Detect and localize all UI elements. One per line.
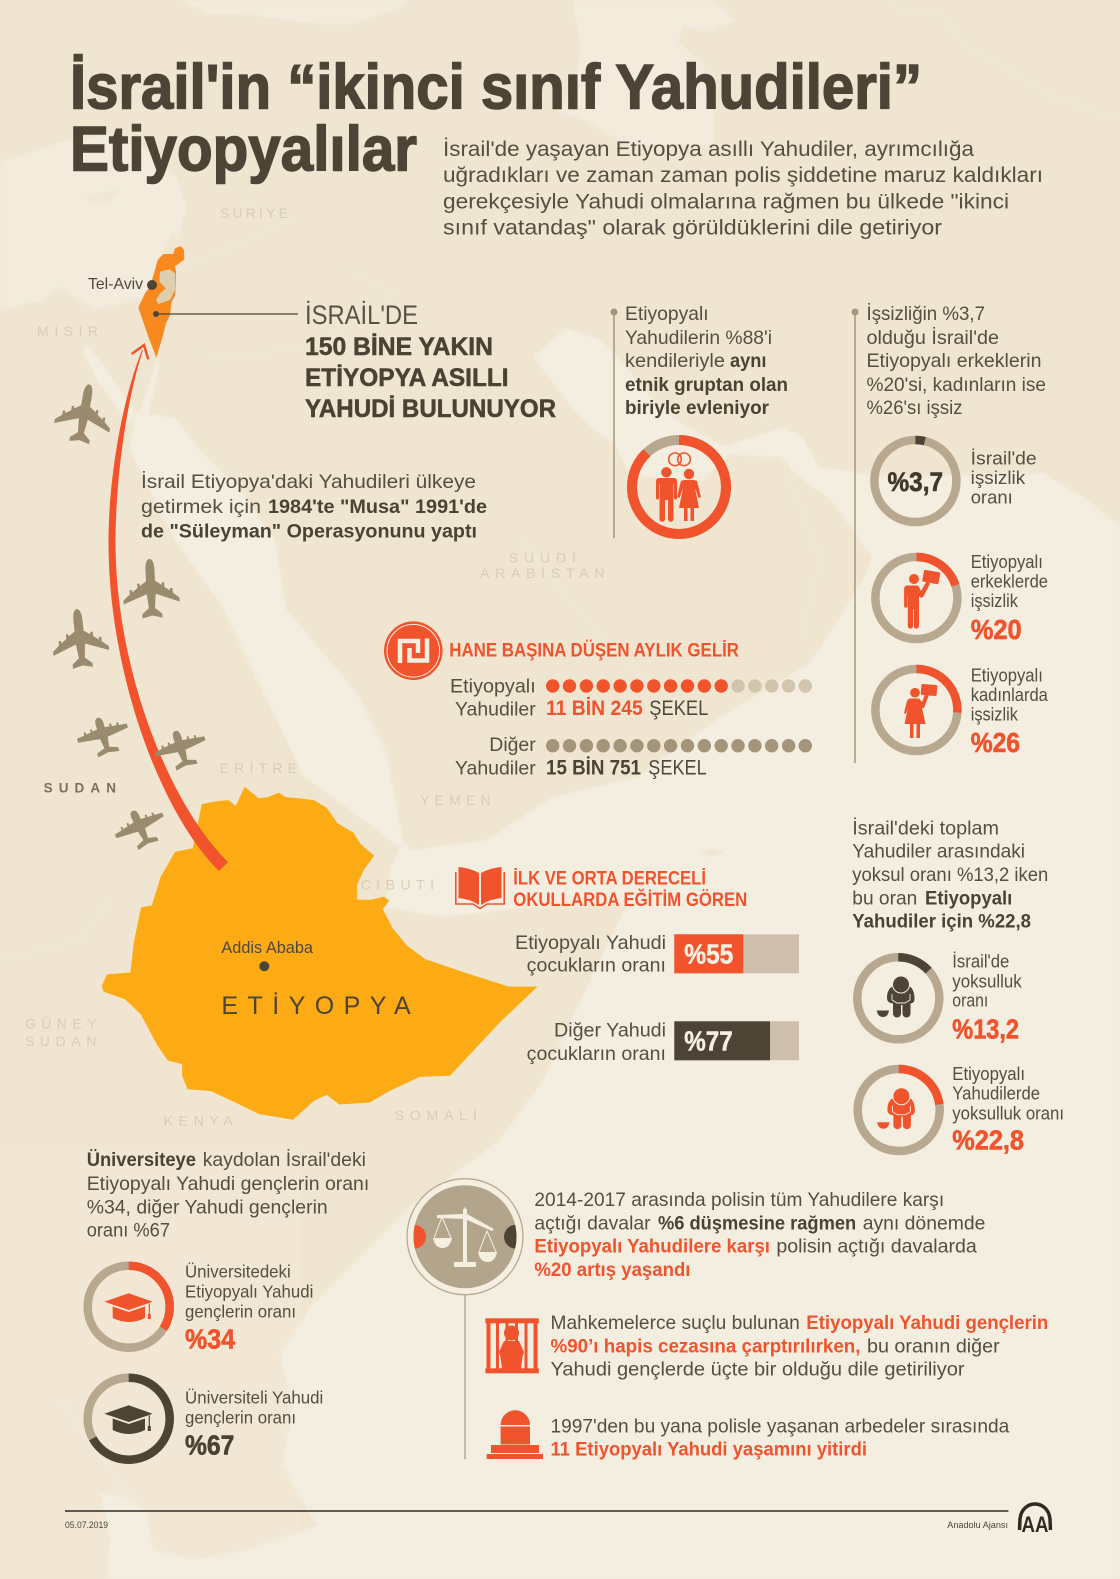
panel: unemployment (852, 302, 1049, 763)
panel: marriage: kendileriyle (625, 350, 725, 372)
map labels (25, 204, 604, 1128)
label: Ethiopia: ETİYOPYA (221, 991, 411, 1020)
label: Ethiopian Jews (450, 675, 536, 721)
label: other children (527, 1020, 666, 1065)
title: Etiyopyalılar (70, 114, 417, 184)
label: other Jews: Yahudiler (455, 757, 536, 779)
label: Israel unemployment: İsrail'de (971, 447, 1037, 468)
ring: 3.7 percent (874, 440, 956, 522)
logo: Anadolu Agency (1020, 1504, 1050, 1537)
icon: tombstone (487, 1410, 543, 1459)
map labels: YEMEN (420, 792, 491, 808)
footer: Anadolu Ajansı (947, 1520, 1008, 1531)
text: police cases: Etiyopyalı Yahudilere karşı (534, 1236, 770, 1258)
ring: 22.8 percent (858, 1069, 940, 1151)
panel: marriage: Yahudilerin %88'i (625, 327, 772, 349)
callout: 150 thousand: 150 BİNE YAKIN (305, 333, 493, 361)
text: police cases: %6 düşmesine rağmen (658, 1212, 856, 1234)
label: Ethiopian university (185, 1262, 313, 1354)
label: Ethiopian Jews: Yahudiler (455, 699, 536, 721)
icon: graduation cap dark (104, 1405, 153, 1434)
label: Israel poverty: oranı (952, 990, 988, 1011)
ring: 13.2 percent (857, 957, 939, 1039)
text: police cases: 2014-2017 arasında polisin tüm Yahudilere karşı (534, 1189, 944, 1211)
dots: other income (546, 739, 812, 752)
label: Ethiopian poverty: %22,8 (952, 1124, 1024, 1155)
large plane 2 (121, 558, 180, 619)
label: Israel unemployment: oranı (971, 486, 1013, 507)
text: poverty: İsrail'deki toplam (852, 816, 999, 839)
text: court: %90’ı hapis cezasına çarptırılırken, (550, 1335, 860, 1357)
panel: marriage: Etiyopyalı (625, 303, 709, 325)
large plane 1 (52, 380, 117, 447)
text: police cases: açtığı davalar (534, 1212, 651, 1234)
Israel map (138, 246, 184, 358)
text: police cases: %20 artış yaşandı (534, 1259, 690, 1281)
map labels: ERİTRE (220, 759, 297, 776)
text: deaths: 1997'den bu yana polisle yaşanan arbedeler sırasında (550, 1415, 1009, 1437)
map labels: KENYA (164, 1112, 234, 1128)
label: Israel poverty: %13,2 (952, 1013, 1019, 1044)
text: poverty: Yahudiler için %22,8 (852, 911, 1031, 933)
label: Israel poverty (952, 951, 1022, 1044)
large plane 3 (49, 606, 111, 671)
label: other Jews: Diğer (489, 734, 536, 756)
small plane 1 (73, 710, 134, 762)
panel: marriage: etnik gruptan olan (625, 374, 788, 396)
text: court: bu oranın diğer (867, 1335, 1000, 1357)
label: women unemployment: kadınlarda (971, 684, 1049, 705)
panel: marriage (610, 303, 788, 538)
text: deaths (550, 1415, 1009, 1461)
heading: education: OKULLARDA EĞİTİM GÖREN (513, 889, 747, 911)
panel: unemployment: %20'si, kadınların ise (866, 374, 1046, 396)
label: Ethiopian children: çocukların oranı (527, 955, 666, 977)
label: Ethiopian university: gençlerin oranı (185, 1301, 296, 1321)
label: Ethiopian children: Etiyopyalı Yahudi (515, 932, 666, 954)
label: women unemployment: %26 (971, 727, 1020, 758)
value: 3.7 percent: %3,7 (888, 467, 943, 497)
footer (65, 1504, 1050, 1537)
bar: 77 percent: %77 (684, 1026, 733, 1057)
panel: unemployment: %26'sı işsiz (866, 397, 962, 419)
label: Ethiopian poverty: Etiyopyalı (952, 1063, 1025, 1084)
panel: income (384, 621, 812, 779)
text: university: Üniversiteye (87, 1148, 196, 1171)
panel: marriage: aynı (730, 350, 766, 372)
panel: unemployment: Etiyopyalı erkeklerin (866, 350, 1042, 372)
text: police cases: polisin açtığı davalarda (776, 1236, 977, 1258)
ring: 34 percent (88, 1266, 170, 1348)
title (70, 52, 922, 184)
label: Tel-Aviv with dot: Tel-Aviv (88, 276, 143, 293)
text: university: oranı %67 (87, 1220, 170, 1242)
ring: 20 percent (875, 557, 957, 639)
label: Ethiopian poverty: Yahudilerde (952, 1082, 1040, 1103)
dots: Ethiopian income (546, 679, 812, 693)
icon: book (456, 867, 504, 908)
logo: Anadolu Agency: AA (1022, 1512, 1049, 1537)
map labels: GÜNEY (25, 1015, 97, 1032)
label: men unemployment: %20 (971, 614, 1022, 645)
bar: 55 percent (674, 934, 799, 973)
heading: education: İLK VE ORTA DERECELİ (513, 868, 706, 889)
label: Israel poverty: yoksulluk (952, 971, 1022, 992)
text: poverty: bu oran (852, 887, 917, 909)
intro paragraph: uğradıkları ve zaman zaman polis şiddetine maruz kaldıkları (443, 164, 1043, 187)
callout line to Israel (153, 311, 298, 317)
icon: poor person red (877, 1088, 915, 1129)
callout: 150 thousand: İSRAİL'DE (305, 299, 418, 330)
text: court: Mahkemelerce suçlu bulunan (550, 1312, 800, 1334)
ring: 88 percent (632, 440, 726, 534)
text: operations: de "Süleyman" Operasyonunu yaptı (141, 520, 477, 542)
heading: income: HANE BAŞINA DÜŞEN AYLIK GELİR (449, 641, 739, 662)
label: men unemployment: işsizlik (971, 590, 1019, 611)
label: Israel unemployment: işsizlik (971, 467, 1026, 488)
value: Ethiopian income (546, 697, 708, 720)
icon: poor person dark (877, 976, 914, 1018)
label: other university: %67 (185, 1429, 234, 1460)
label: Israel poverty: İsrail'de (952, 951, 1009, 972)
text: university: Etiyopyalı Yahudi gençlerin oranı (87, 1173, 369, 1195)
label: Ethiopian Jews: Etiyopyalı (450, 675, 536, 697)
text: police cases (534, 1189, 985, 1281)
small plane 2 (150, 723, 212, 775)
label: Ethiopian university: %34 (185, 1323, 235, 1354)
label: other Jews (455, 734, 536, 779)
value: other income: 15 BİN 751 (546, 756, 641, 779)
heading: education (513, 868, 747, 911)
text: operations (141, 470, 487, 542)
label: women unemployment: işsizlik (971, 704, 1019, 725)
bar: 55 percent: %55 (684, 938, 733, 969)
label: other children: çocukların oranı (527, 1043, 666, 1065)
callout: 150 thousand: YAHUDİ BULUNUYOR (305, 395, 556, 423)
intro paragraph: İsrail'de yaşayan Etiyopya asıllı Yahudiler, ayrımcılığa (443, 138, 974, 161)
map labels: MISIR (37, 323, 98, 339)
panel: justice (402, 1179, 1048, 1461)
label: other university: gençlerin oranı (185, 1407, 296, 1427)
label: Ethiopian children (515, 932, 666, 977)
text: operations: getirmek için (141, 496, 261, 518)
title: İsrail'in “ikinci sınıf Yahudileri” (70, 52, 922, 122)
text: operations: İsrail Etiyopya'daki Yahudileri ülkeye (141, 470, 476, 493)
map labels: SUUDİ (509, 549, 576, 566)
label: men unemployment: erkeklerde (971, 571, 1048, 592)
label: Ethiopian university: Etiyopyalı Yahudi (185, 1282, 313, 1302)
value: other income: ŞEKEL (648, 756, 707, 779)
map labels: ARABİSTAN (480, 564, 604, 581)
label: Sudan: SUDAN (44, 781, 116, 796)
map labels: SURİYE (220, 204, 288, 221)
ring: 26 percent (875, 669, 957, 751)
label: Ethiopian poverty (952, 1063, 1064, 1155)
icon: couple with rings (656, 453, 701, 522)
icon: scales (402, 1179, 528, 1295)
label: men unemployment (971, 551, 1048, 645)
text: university: %34, diğer Yahudi gençlerin (87, 1196, 328, 1218)
text: university (87, 1148, 369, 1242)
icon: shekel (384, 621, 443, 680)
callout: 150 thousand (305, 299, 556, 423)
icon: prison (485, 1318, 539, 1373)
intro paragraph: gerekçesiyle Yahudi olmalarına rağmen bu ülkede "ikinci (443, 190, 1009, 214)
text: poverty (852, 816, 1048, 933)
label: Addis Ababa with dot (221, 938, 314, 971)
ring: 67 percent (88, 1378, 170, 1460)
icon: graduation cap red (104, 1293, 153, 1322)
text: poverty: Etiyopyalı (925, 887, 1012, 909)
text: deaths: 11 Etiyopyalı Yahudi yaşamını yitirdi (550, 1439, 867, 1461)
footer: 05.07.2019 (65, 1520, 108, 1531)
map labels: CİBUTİ (361, 875, 434, 892)
label: other children: Diğer Yahudi (554, 1020, 666, 1042)
small plane 3 (109, 800, 172, 856)
text: court: Etiyopyalı Yahudi gençlerin (806, 1312, 1048, 1334)
value: other income (546, 756, 707, 779)
label: men unemployment: Etiyopyalı (971, 551, 1043, 572)
panel: university (87, 1148, 369, 1460)
icon: woman with placard (904, 684, 937, 738)
label: women unemployment (971, 665, 1049, 758)
connector line (464, 1295, 466, 1459)
callout: 150 thousand: ETİYOPYA ASILLI (305, 364, 509, 392)
label: Israel unemployment (971, 447, 1037, 507)
map labels: SUDAN (25, 1033, 96, 1049)
text: university: kaydolan İsrail'deki (203, 1148, 366, 1171)
text: poverty: Yahudiler arasındaki (852, 841, 1025, 863)
panel: education (456, 867, 799, 1065)
map labels: SOMALİ (395, 1106, 477, 1123)
panel: poverty (852, 816, 1064, 1155)
label: other university: Üniversiteli Yahudi (185, 1387, 323, 1407)
label: Ethiopian poverty: yoksulluk oranı (952, 1102, 1064, 1123)
panel: marriage: biriyle evleniyor (625, 397, 769, 419)
label: other university (185, 1387, 323, 1460)
text: court: Yahudi gençlerde üçte bir olduğu dile getiriliyor (550, 1359, 965, 1381)
icon: man with placard (904, 570, 940, 629)
intro paragraph: sınıf vatandaş" olarak görüldüklerini dile getiriyor (443, 216, 942, 240)
intro paragraph (443, 138, 1043, 240)
value: Ethiopian income: ŞEKEL (649, 697, 708, 720)
migration arrow (108, 345, 228, 871)
text: poverty: yoksul oranı %13,2 iken (852, 864, 1048, 886)
label: Addis Ababa with dot: Addis Ababa (221, 938, 314, 957)
text: court (550, 1312, 1048, 1381)
text: police cases: aynı dönemde (863, 1212, 985, 1234)
Ethiopia map shape (102, 787, 537, 1120)
panel: unemployment: olduğu İsrail'de (866, 326, 999, 349)
value: Ethiopian income: 11 BİN 245 (546, 697, 643, 720)
text: operations: 1984'te "Musa" 1991'de (268, 496, 487, 518)
label: women unemployment: Etiyopyalı (971, 665, 1043, 686)
label: Ethiopian university: Üniversitedeki (185, 1262, 291, 1282)
panel: unemployment: İşsizliğin %3,7 (866, 302, 985, 325)
bar: 77 percent (674, 1021, 799, 1060)
